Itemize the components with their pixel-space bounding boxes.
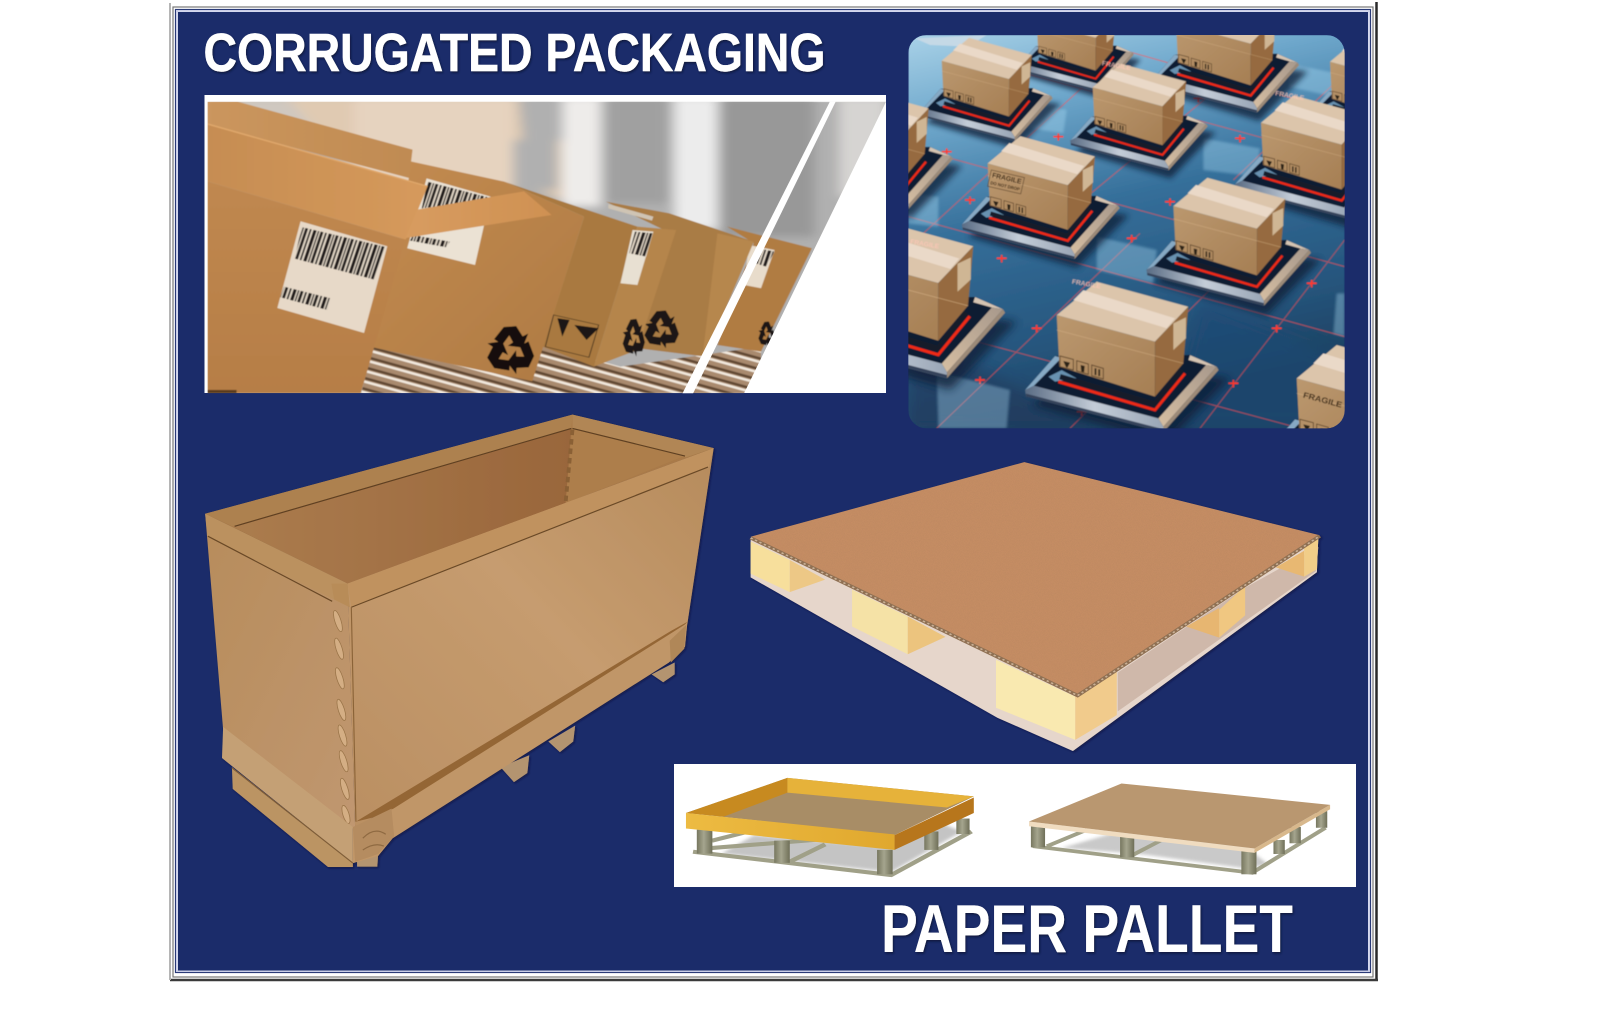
hologram fragile text: FRAGILE bbox=[1071, 278, 1102, 290]
hologram fragile text: FRAGILE bbox=[1101, 60, 1132, 72]
crates row front bbox=[908, 177, 1345, 428]
crate with fragile label: FRAGILE bbox=[991, 172, 1022, 186]
illustration: paper pallet bbox=[751, 462, 1320, 751]
box 1 bbox=[208, 102, 552, 393]
infographic canvas bbox=[169, 2, 1378, 982]
hologram fragile text: FRAGILE bbox=[910, 238, 940, 250]
illustration: large corrugated box bbox=[205, 415, 714, 867]
navy background panel bbox=[178, 12, 1368, 970]
crate with fragile label: DO NOT DROP bbox=[990, 180, 1020, 192]
photo strip: two paper pallets bbox=[674, 764, 1356, 887]
pallet deck bbox=[751, 462, 1320, 695]
pallet base board bbox=[751, 538, 1318, 751]
red grid crosses bbox=[942, 95, 1317, 416]
stitched corner tabs bbox=[332, 610, 352, 824]
hologram fragile text bbox=[910, 60, 1305, 290]
crate with fragile label bbox=[962, 136, 1129, 268]
box 3 bbox=[504, 182, 676, 367]
box 5 bbox=[717, 227, 812, 352]
crates row top bbox=[930, 35, 1345, 160]
photo panel: automated warehouse platforms bbox=[908, 35, 1345, 428]
hologram labels bbox=[908, 63, 1345, 428]
top-left platform edge bbox=[915, 35, 987, 47]
box interior bbox=[205, 415, 714, 584]
base sleeve bbox=[222, 622, 687, 867]
panel frame bbox=[170, 2, 1378, 980]
title: paper pallet: PAPER PALLET bbox=[881, 891, 1293, 967]
hologram fragile text: FRAGILE bbox=[1275, 90, 1305, 102]
box 2 bbox=[354, 161, 584, 381]
support blocks bbox=[751, 538, 1318, 740]
box 4 bbox=[606, 202, 754, 357]
corrugated deck edge bbox=[751, 536, 1320, 696]
right underside shade bbox=[1118, 547, 1318, 711]
title: corrugated packaging: CORRUGATED PACKAGING bbox=[204, 23, 826, 83]
pallet feet bbox=[357, 663, 675, 867]
white diagonal stripe bbox=[683, 102, 836, 393]
photo panel: boxes on conveyor bbox=[204, 95, 887, 393]
crates row second bbox=[908, 38, 1345, 230]
gold rim pallet bbox=[686, 778, 974, 875]
crate corner fragile label: FRAGILE bbox=[1302, 391, 1344, 410]
flat deck pallet bbox=[1029, 783, 1330, 874]
box walls bbox=[205, 448, 714, 828]
